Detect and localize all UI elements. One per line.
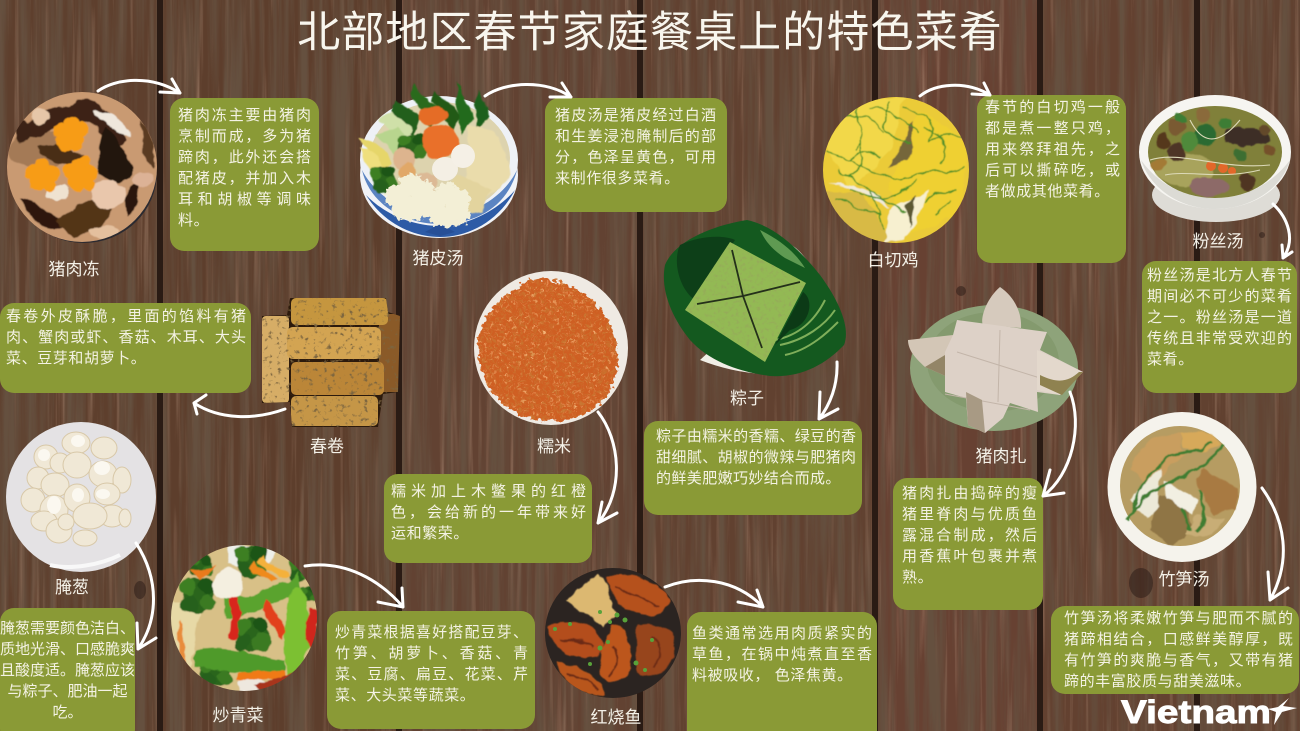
arrow: poached chicken xyxy=(920,83,990,96)
arrow: stir-fried vegetables xyxy=(305,565,403,607)
panel: pork roll description: 熟。 xyxy=(902,568,933,586)
dish label: 粉丝汤: 粉丝汤 xyxy=(1192,232,1244,251)
panel: glass noodle soup description: 粉丝汤是北方人春节 xyxy=(1147,266,1292,284)
panel: pork jelly description: 蹄肉，此外还会搭 xyxy=(178,148,311,166)
arrow: braised fish xyxy=(665,580,763,607)
arrow: bamboo shoot soup xyxy=(1262,488,1288,600)
panel: rice cake description xyxy=(644,421,862,515)
panel: braised fish description: 料被吸收， 色泽焦黄。 xyxy=(692,666,853,684)
food: braised fish xyxy=(545,568,681,698)
panel: pork jelly description: 耳和胡椒等调味 xyxy=(178,190,311,208)
panel: glass noodle soup description: 之一。粉丝汤是一道 xyxy=(1147,308,1292,326)
panel: glass noodle soup description xyxy=(1142,261,1297,393)
arrow: rice cake xyxy=(819,362,838,419)
food: pork skin soup bowl xyxy=(359,80,518,238)
panel: pork skin soup description xyxy=(545,98,727,212)
panel: pork skin soup description: 猪皮汤是猪皮经过白酒 xyxy=(555,106,716,124)
panel: pickled onion description xyxy=(0,608,135,731)
panel: pork roll description xyxy=(893,478,1043,610)
panel: stir-fried vegetables description: 菜、大头菜等蔬菜。 xyxy=(335,686,475,704)
panel: bamboo shoot soup description: 猪蹄相结合，口感鲜美醇厚，既 xyxy=(1064,630,1293,648)
panel: spring roll description: 肉、蟹肉或虾、香菇、木耳、大头 xyxy=(6,328,246,346)
panel: pork skin soup description: 和生姜浸泡腌制后的部 xyxy=(555,128,716,144)
panel: spring roll description xyxy=(0,303,251,393)
dish label: 红烧鱼: 红烧鱼 xyxy=(590,708,642,727)
panel: pickled onion description: 质地光滑、口感脆爽 xyxy=(0,640,135,658)
dish label: 腌葱: 腌葱 xyxy=(55,578,89,597)
panel: rice cake description: 的鲜美肥嫩巧妙结合而成。 xyxy=(656,470,841,486)
panel: red sticky rice description: 糯米加上木鳖果的红橙 xyxy=(391,482,586,500)
arrow: pork jelly xyxy=(98,79,180,93)
panel: pork roll description: 露混合制成，然后 xyxy=(902,526,1037,544)
food: glass noodle soup bowl xyxy=(1139,95,1291,222)
dish label: 猪皮汤: 猪皮汤 xyxy=(412,249,464,268)
arrow: glass noodle soup xyxy=(1273,204,1292,258)
food: Vietnamese pork roll on plate xyxy=(908,287,1083,433)
panel: pickled onion description: 吃。 xyxy=(52,704,82,720)
panel: stir-fried vegetables description: 菜、豆腐、扁豆、花菜、芹 xyxy=(335,666,528,682)
panel: pork jelly description: 烹制而成，多为猪 xyxy=(178,128,311,144)
panel: glass noodle soup description: 传统且非常受欢迎的 xyxy=(1147,330,1292,346)
panel: poached chicken description: 者做成其他菜肴。 xyxy=(985,183,1110,200)
panel: pork jelly description: 猪肉冻主要由猪肉 xyxy=(178,106,311,124)
panel: poached chicken description: 都是煮一整只鸡， xyxy=(985,120,1120,137)
dish label: 猪肉冻: 猪肉冻 xyxy=(48,260,100,279)
panel: poached chicken description: 春节的白切鸡一般 xyxy=(985,99,1120,116)
panel: poached chicken description: 后可以撕碎吃，或 xyxy=(985,162,1120,179)
arrow: pork skin soup xyxy=(485,83,571,97)
panel: braised fish description: 草鱼，在锅中炖煮直至香 xyxy=(692,646,872,662)
food: bamboo shoot soup xyxy=(1108,412,1256,562)
panel: braised fish description xyxy=(687,612,877,731)
arrow: pickled onion xyxy=(136,543,156,649)
arrow: red sticky rice xyxy=(598,412,617,523)
panel: glass noodle soup description: 期间必不可少的菜肴 xyxy=(1147,288,1292,304)
dish label: 春卷: 春卷 xyxy=(310,437,344,456)
panel: bamboo shoot soup description: 有竹笋的爽脆与香气，又带有猪 xyxy=(1064,652,1293,668)
panel: stir-fried vegetables description: 炒青菜根据喜好搭配豆芽、 xyxy=(335,624,528,640)
panel: poached chicken description xyxy=(977,95,1126,263)
panel: red sticky rice description xyxy=(384,474,592,563)
dish label: 白切鸡: 白切鸡 xyxy=(868,251,918,270)
arrow: pork roll xyxy=(1043,392,1075,496)
panel: pork jelly description: 配猪皮，并加入木 xyxy=(178,170,311,186)
arrow: spring roll xyxy=(194,395,285,417)
logo: Vietnam+: Vietnam xyxy=(1121,694,1271,730)
panel: pork jelly description xyxy=(170,98,319,251)
panel: rice cake description: 粽子由糯米的香糯、绿豆的香 xyxy=(656,428,856,444)
panel: red sticky rice description: 色，会给新的一年带来好 xyxy=(391,504,586,520)
panel: pork roll description: 用香蕉叶包裹并煮 xyxy=(902,548,1037,564)
title: 北部地区春节家庭餐桌上的特色菜肴 xyxy=(297,9,1003,57)
food: poached chicken xyxy=(823,97,969,243)
panel: pork skin soup description: 来制作很多菜肴。 xyxy=(555,170,680,186)
panel: poached chicken description: 用来祭拜祖先，之 xyxy=(985,141,1120,158)
panel: stir-fried vegetables description xyxy=(327,611,535,729)
dish label: 炒青菜: 炒青菜 xyxy=(212,706,264,725)
panel: pork roll description: 猪里脊肉与优质鱼 xyxy=(902,506,1037,522)
panel: pork jelly description: 料。 xyxy=(178,212,209,228)
panel: bamboo shoot soup description: 竹笋汤将柔嫩竹笋与肥而不腻的 xyxy=(1064,610,1293,626)
panel: bamboo shoot soup description: 蹄的丰富胶质与甜美滋味。 xyxy=(1064,672,1251,690)
food: square sticky rice cake on leaf xyxy=(664,220,846,376)
panel: pickled onion description: 与粽子、肥油一起 xyxy=(7,682,128,700)
dish label: 猪肉扎: 猪肉扎 xyxy=(976,447,1026,466)
panel: spring roll description: 春卷外皮酥脆，里面的馅料有猪 xyxy=(6,308,246,324)
food: spring rolls xyxy=(258,295,403,430)
panel: glass noodle soup description: 菜肴。 xyxy=(1147,350,1194,368)
panel: stir-fried vegetables description: 竹笋、胡萝卜、香菇、青 xyxy=(335,644,528,662)
food: red sticky rice xyxy=(470,270,630,430)
food: stir-fried vegetables xyxy=(171,545,317,691)
dish label: 糯米: 糯米 xyxy=(537,437,571,456)
panel: spring roll description: 菜、豆芽和胡萝卜。 xyxy=(6,350,146,366)
food: pork jelly xyxy=(7,92,157,243)
panel: pork skin soup description: 分，色泽呈黄色，可用 xyxy=(555,148,716,166)
dish label: 竹笋汤: 竹笋汤 xyxy=(1158,570,1210,589)
panel: braised fish description: 鱼类通常选用肉质紧实的 xyxy=(692,624,872,642)
panel: rice cake description: 甜细腻、胡椒的微辣与肥猪肉 xyxy=(656,448,856,466)
panel: bamboo shoot soup description xyxy=(1051,606,1299,694)
panel: pickled onion description: 腌葱需要颜色洁白、 xyxy=(0,620,135,636)
food: pickled onions on plate xyxy=(6,422,156,572)
panel: pork roll description: 猪肉扎由捣碎的瘦 xyxy=(902,484,1037,502)
dish label: 粽子: 粽子 xyxy=(730,389,764,408)
panel: red sticky rice description: 运和繁荣。 xyxy=(391,524,469,542)
panel: pickled onion description: 且酸度适。腌葱应该 xyxy=(0,662,135,678)
